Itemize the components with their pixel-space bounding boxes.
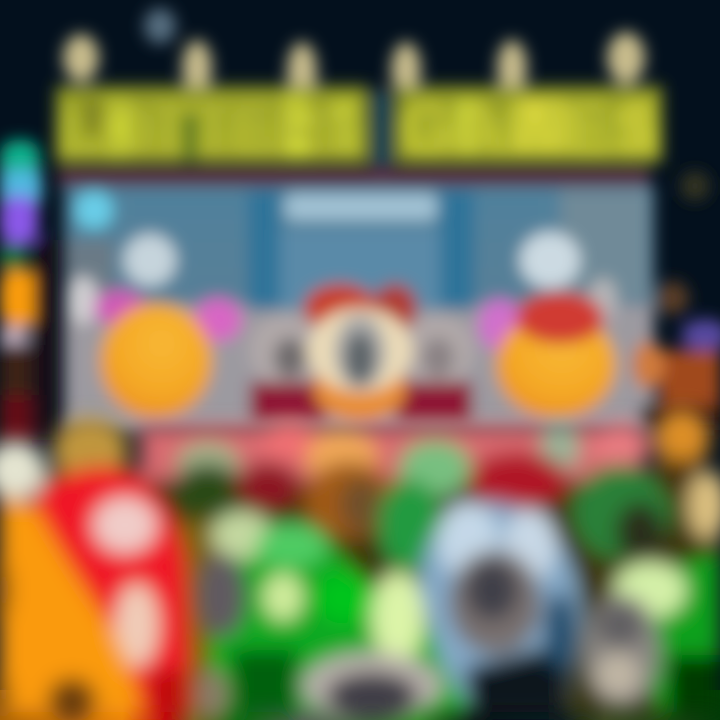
green ball centre bbox=[302, 572, 472, 720]
board highlights bbox=[75, 191, 113, 229]
right background crowd bbox=[655, 281, 689, 315]
title bbox=[56, 86, 662, 170]
left coin bbox=[100, 303, 212, 419]
title: LOTTERY bbox=[60, 89, 364, 169]
second ball row bbox=[172, 464, 244, 520]
bottom edge colour strip bbox=[0, 690, 720, 720]
green ball left bbox=[196, 511, 385, 720]
centre medallion bbox=[249, 284, 474, 424]
pink backing bbox=[94, 290, 146, 326]
main scene upper bbox=[56, 8, 720, 433]
title: GAMES bbox=[400, 89, 658, 169]
red foreground ball bbox=[30, 466, 192, 712]
board frame bbox=[58, 168, 650, 186]
pink ball row bbox=[140, 426, 630, 480]
main scene lower bbox=[0, 408, 720, 720]
right green ball bbox=[584, 550, 720, 712]
olive gap bbox=[178, 520, 218, 712]
blue ball bbox=[418, 502, 582, 712]
marquee bulbs bbox=[63, 8, 710, 201]
orange foreground ball bbox=[0, 495, 142, 720]
left edge signage bbox=[0, 140, 58, 445]
lower base fill bbox=[40, 470, 720, 712]
right coin bbox=[496, 311, 616, 419]
